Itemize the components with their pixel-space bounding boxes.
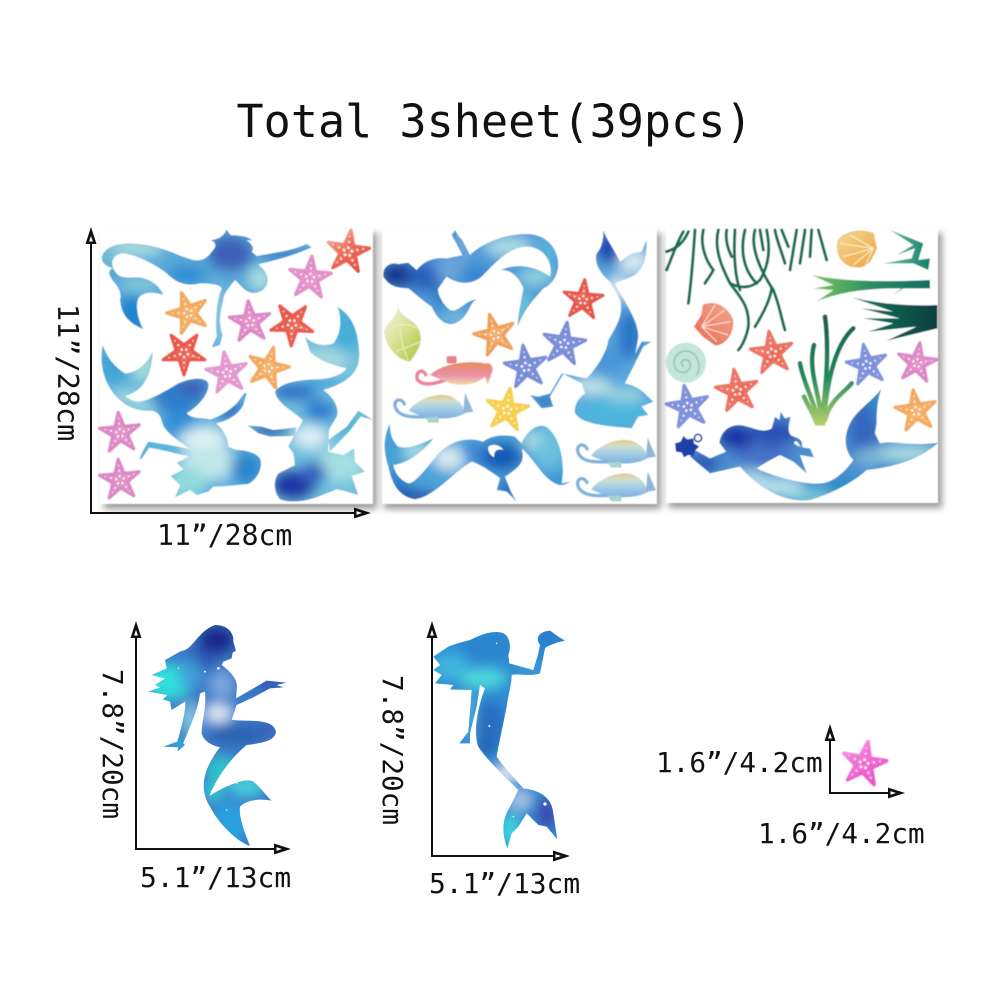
arrow axes: starfish: [824, 724, 905, 798]
mermaid: bottom: [384, 424, 570, 502]
mermaid B: holding shell: [434, 630, 565, 848]
starfish: sheet 2 group: [470, 278, 604, 430]
mermaid: swimming: [690, 388, 938, 501]
arrow axes: mermaid A: [130, 621, 291, 854]
panel: sheet 3: [664, 228, 940, 504]
shell: red scallop: [694, 304, 733, 345]
shell: held by mermaid: [675, 434, 702, 457]
dimension label: starfish height: 1.6”/4.2cm: [656, 746, 823, 779]
starfish: sheet 3 group: [664, 328, 939, 431]
shell: green conch: [384, 308, 421, 362]
dimension label: mermaid A width: 5.1”/13cm: [140, 861, 291, 894]
mermaid: lower right: [248, 306, 373, 502]
shell: orange scallop: [837, 231, 877, 267]
panel: sheet 1: [97, 228, 374, 504]
mermaid A: seated galaxy: [148, 625, 286, 846]
seahorse: blue 3: [578, 471, 656, 501]
seaweed: central plant: [800, 317, 853, 423]
dimension label: mermaid B height: 7.8”/20cm: [376, 675, 409, 825]
title: Total 3sheet(39pcs): [236, 95, 752, 148]
icon: small magenta starfish: [839, 738, 889, 786]
seahorse: pink: [417, 356, 493, 386]
arrow axes: mermaid B: [426, 621, 570, 862]
mermaid: top swimming: [101, 229, 312, 348]
dimension label: sheet height: 11”/28cm: [51, 304, 84, 441]
seaweed: top hanging strands: [667, 230, 827, 350]
seaweed: lower dark branch: [852, 297, 937, 341]
dimension label: mermaid A height: 7.8”/20cm: [96, 669, 129, 819]
panel: sheet 2: [382, 228, 658, 504]
dimension label: mermaid B width: 5.1”/13cm: [429, 867, 580, 900]
seaweed: middle branch: [812, 275, 930, 302]
seahorse: blue 1: [395, 393, 473, 423]
panel: sheet shadows: [104, 233, 942, 509]
arrow axes: sheet 1: [86, 227, 371, 518]
seahorse: blue 2: [578, 438, 656, 468]
mermaid: right: [530, 230, 654, 429]
mermaid: top left: [382, 230, 559, 326]
dimension label: sheet width: 11”/28cm: [157, 519, 292, 552]
mermaid: lower left: [100, 345, 262, 498]
dimension label: starfish width: 1.6”/4.2cm: [758, 817, 925, 850]
seaweed: top right branch: [883, 230, 930, 270]
shell: spiral: [666, 343, 706, 383]
starfish: sheet 1 group: [98, 227, 372, 499]
